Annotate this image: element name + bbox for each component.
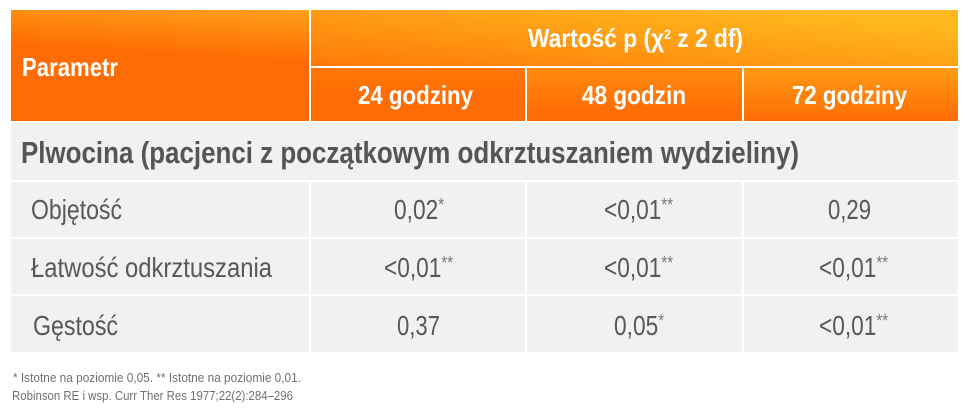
row: ease of expectoration <box>11 239 958 294</box>
row: ease of expectoration: ** <box>441 253 453 273</box>
header cell: Parametr: Parametr <box>22 52 118 82</box>
row: ease of expectoration: ** <box>661 253 673 273</box>
header cell: p value: 2 <box>664 26 671 42</box>
row: volume: 0,29 <box>828 194 871 225</box>
header cell: 24 hours: 24 godziny <box>358 80 473 110</box>
footnotes <box>12 370 301 403</box>
row: density: ** <box>876 311 888 331</box>
row: volume: 0,02 <box>394 194 448 225</box>
row: ease of expectoration: <0,01 <box>604 252 674 283</box>
row: volume: Objętość <box>31 194 122 225</box>
row: ease of expectoration: <0,01 <box>384 252 454 283</box>
row: density: * <box>658 311 664 331</box>
section heading: sputum <box>11 123 958 180</box>
row: volume: * <box>438 195 444 215</box>
header cell: Parametr <box>11 10 309 121</box>
table header <box>11 10 958 121</box>
header cell: 24 hours <box>311 68 525 121</box>
header cell: p value: z 2 df) <box>671 23 743 53</box>
footnotes: * Istotne na poziomie 0,05. ** Istotne na poziomie 0,01. <box>13 370 301 385</box>
footnotes: Robinson RE i wsp. Curr Ther Res 1977;22(2):284–296 <box>12 388 293 403</box>
row: volume: <0,01 <box>604 194 674 225</box>
row: density <box>11 296 958 352</box>
section heading: sputum: Plwocina (pacjenci z początkowym odkrztuszaniem wydzieliny) <box>21 135 799 170</box>
row: ease of expectoration: Łatwość odkrztuszania <box>31 252 273 283</box>
row: density: 0,37 <box>397 310 440 341</box>
row: density: Gęstość <box>33 310 118 341</box>
header cell: 72 hours <box>744 68 958 121</box>
header cell: 48 hours <box>527 68 742 121</box>
row: volume: ** <box>661 195 673 215</box>
row: volume <box>11 182 958 237</box>
header cell: 48 hours: 48 godzin <box>582 80 686 110</box>
row: ease of expectoration: <0,01 <box>819 252 889 283</box>
header cell: p value: Wartość p (χ <box>528 23 684 53</box>
row: ease of expectoration: ** <box>876 253 888 273</box>
header cell: p value <box>311 10 958 66</box>
row: density: <0,01 <box>819 310 889 341</box>
row: density: 0,05 <box>614 310 668 341</box>
header cell: 72 hours: 72 godziny <box>792 80 907 110</box>
